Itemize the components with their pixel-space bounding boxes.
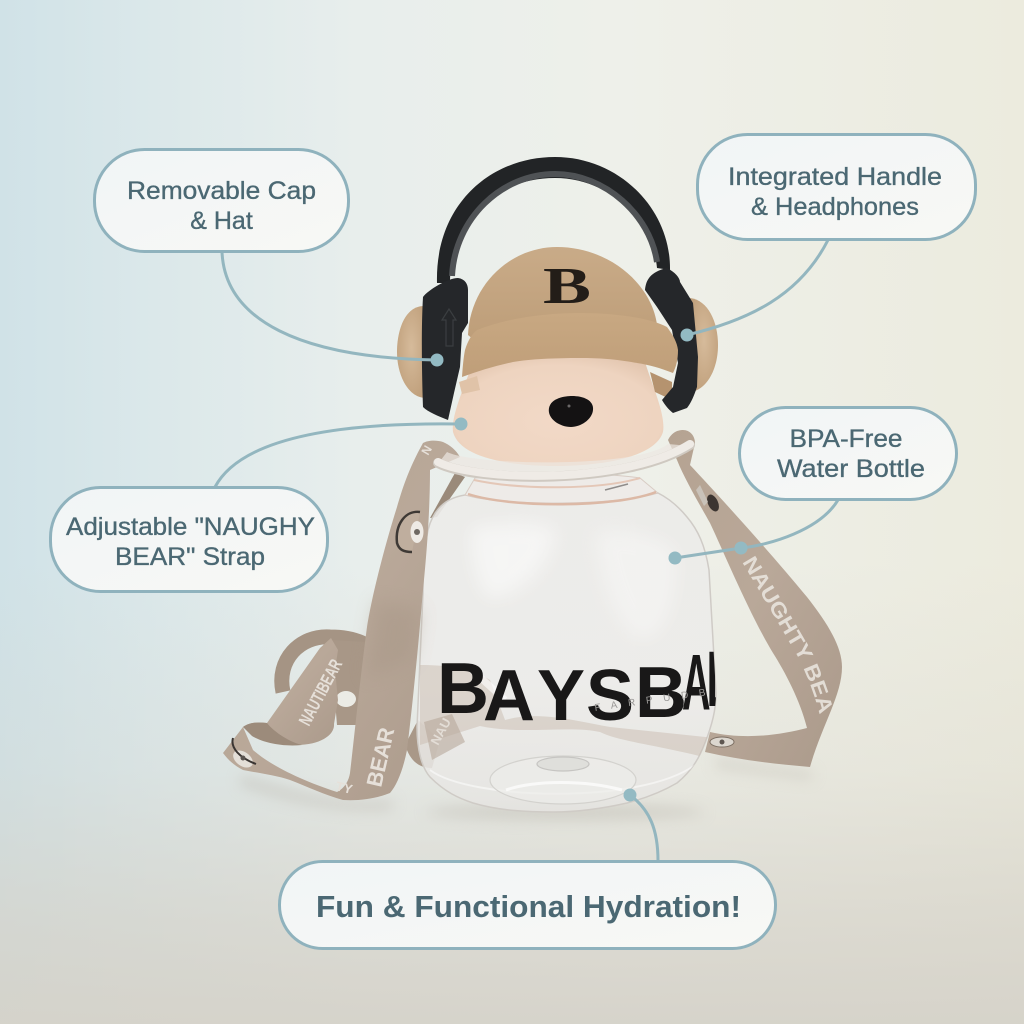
callout: removable cap and hat: & Hat	[190, 207, 253, 235]
strap: behind bottle left	[405, 473, 465, 768]
bottle body	[417, 474, 716, 812]
callout: adjustable strap: BEAR" Strap	[115, 543, 265, 571]
strap: right section	[668, 430, 842, 767]
strap text: BEAR: BEAR	[362, 725, 399, 789]
icon: bear nose	[549, 396, 593, 427]
hinge clips	[459, 376, 480, 394]
bottle logo: AL	[682, 635, 731, 727]
strap text: top: N	[418, 443, 435, 458]
eye icon on right strap top	[696, 485, 721, 513]
callout: removable cap and hat	[94, 150, 444, 366]
bottle logo: FARPUDB	[594, 687, 707, 714]
hat cap dome	[468, 247, 657, 345]
callout: adjustable strap: Adjustable "NAUGHY	[66, 513, 315, 541]
headphones handle band	[437, 157, 670, 283]
callout: adjustable strap	[50, 418, 468, 592]
bottle base	[490, 756, 636, 804]
callout: integrated handle and headphones: & Headphones	[751, 193, 919, 221]
bottle logo: BAYSB	[437, 649, 687, 736]
callout: fun and functional hydration: Fun & Functional Hydration!	[316, 889, 741, 924]
bottle highlights and reflections: NAU	[427, 715, 454, 747]
hat logo letter: B	[543, 258, 591, 315]
strap text: folded section: NAUTIBEAR	[295, 656, 346, 729]
floor shadows	[240, 758, 815, 820]
callout: integrated handle and headphones: Integrated Handle	[728, 163, 942, 191]
eye icon on strap tail	[230, 738, 256, 771]
callout: BPA-free water bottle	[668, 408, 956, 564]
bear head lid	[453, 353, 672, 466]
eye icon on right strap tail	[710, 737, 734, 747]
callout: removable cap and hat: Removable Cap	[127, 177, 316, 205]
callout: BPA-free water bottle: Water Bottle	[777, 455, 925, 483]
white neck ring	[437, 444, 690, 477]
callout: fun and functional hydration	[280, 788, 776, 948]
strap text: partial: TY	[334, 778, 354, 797]
left ear cup	[397, 278, 468, 420]
callout: BPA-free water bottle: BPA-Free	[790, 425, 902, 453]
callout: integrated handle and headphones	[680, 134, 976, 342]
strap: left loose loop behind	[243, 637, 368, 745]
right ear cup	[645, 268, 718, 413]
strap text: NAUGHTY BEAR: NAUGHTY BEA	[742, 556, 832, 714]
hat visor	[462, 258, 678, 377]
bottle highlights and reflections	[420, 523, 715, 794]
arrow embossed on ear cup	[442, 309, 456, 346]
eye icon on left strap	[397, 512, 424, 552]
fold shadow	[243, 722, 302, 745]
bottle neck rim	[465, 474, 658, 504]
soft shading on strap	[365, 600, 420, 680]
strap: long left section	[223, 441, 460, 800]
